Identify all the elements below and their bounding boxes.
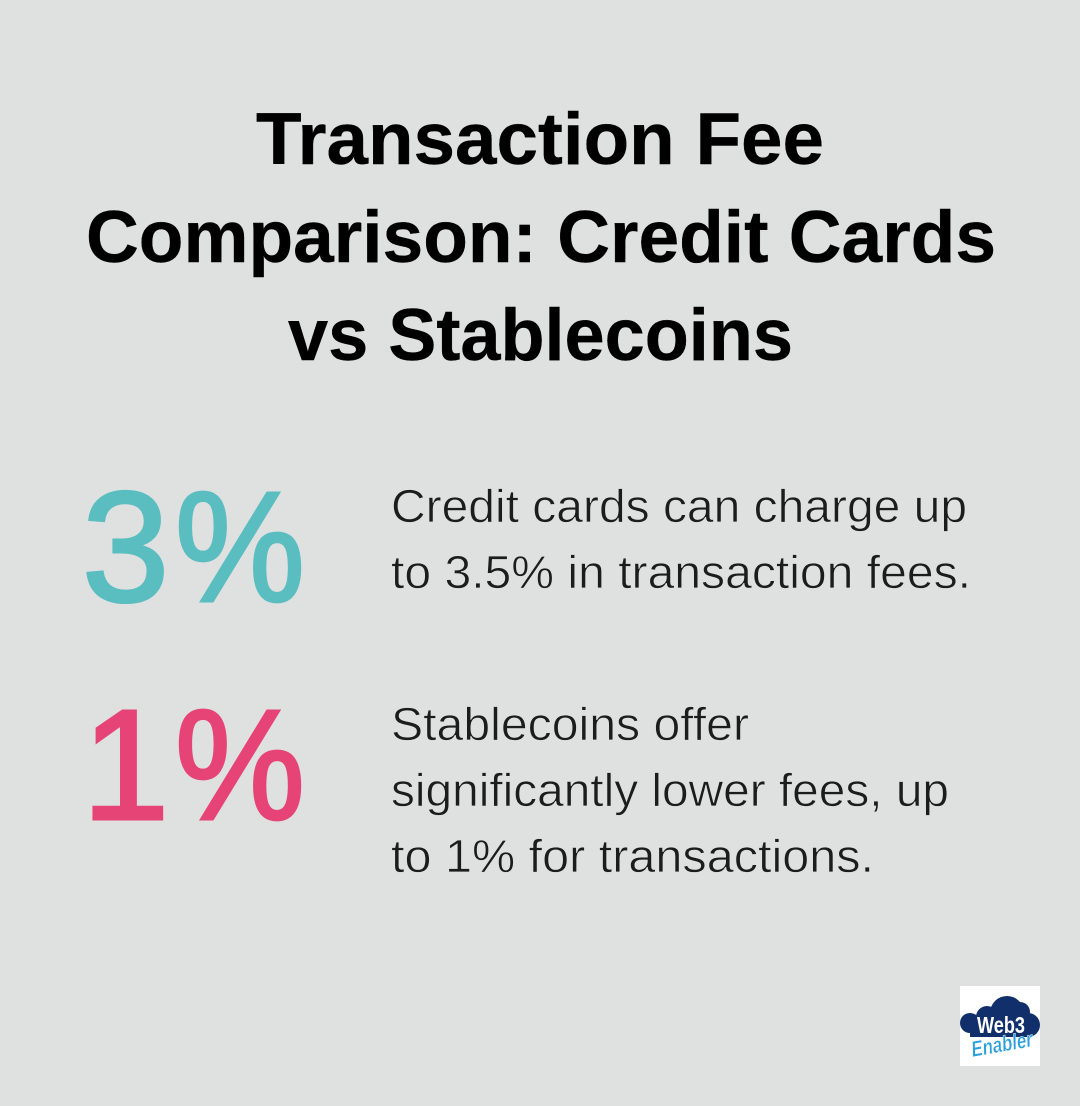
text: stablecoin fees: significantly lower fees, up [391,764,949,816]
text: stablecoin fees [391,698,949,882]
text: credit card fees [391,480,971,598]
stat: 1% stablecoins [82,678,305,853]
title [86,99,996,376]
title: Transaction Fee [256,99,824,180]
logo: Web3 Enabler: Web3 [977,1012,1025,1038]
icon: cloud [960,996,1040,1037]
stat: 3% credit cards: 3 [82,460,169,635]
text: credit card fees: Credit cards can charge up [391,480,967,532]
logo: Web3 Enabler [960,986,1040,1066]
stat: 3% credit cards [82,460,305,635]
stat: 1% stablecoins: 1 [82,678,169,853]
stat: 1% stablecoins: % [175,678,305,853]
logo: Web3 Enabler: Enabler [969,1026,1036,1062]
stat: 3% credit cards: % [175,460,305,635]
text: stablecoin fees: Stablecoins offer [391,698,749,750]
title: vs Stablecoins [288,295,793,376]
title: Comparison: Credit Cards [86,197,996,278]
text: stablecoin fees: to 1% for transactions. [391,830,874,882]
text: credit card fees: to 3.5% in transaction fees. [391,546,971,598]
